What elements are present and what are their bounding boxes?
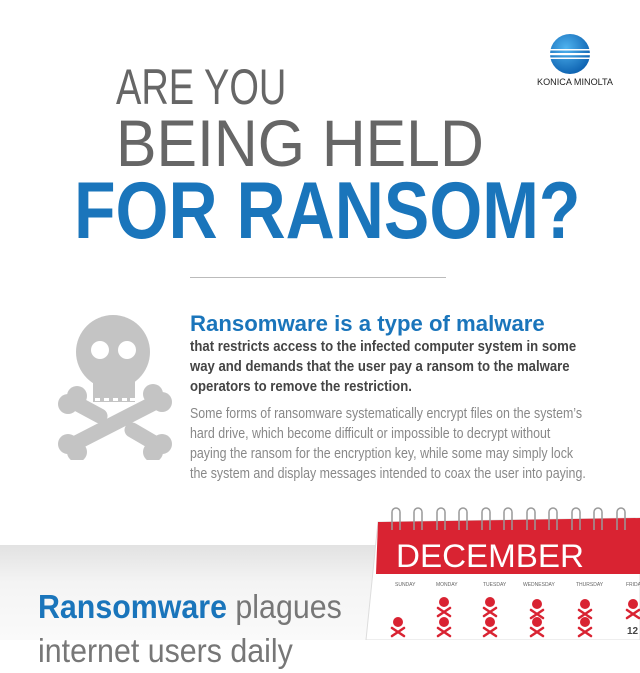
title: ARE YOU xyxy=(116,59,286,115)
text block: definition xyxy=(190,311,586,482)
text block: definition: Ransomware is a type of malware xyxy=(190,311,545,336)
calendar: WEDNESDAY xyxy=(523,582,556,588)
title: FOR RANSOM? xyxy=(74,166,580,256)
calendar: THURSDAY xyxy=(576,582,604,588)
text: internet users daily xyxy=(38,632,293,669)
calendar xyxy=(366,507,640,640)
logo: Konica Minolta xyxy=(537,34,614,88)
text block: definition: that restricts access to the infected computer system in some xyxy=(190,339,576,355)
heading: ransomware plagues xyxy=(38,588,342,669)
text block: definition: paying the ransom for the encryption key, while some may simply lock xyxy=(190,446,573,462)
calendar: MONDAY xyxy=(436,582,458,588)
calendar: 12 xyxy=(627,626,639,637)
title: BEING HELD xyxy=(116,106,484,180)
bottom gray band xyxy=(0,545,640,640)
logo: Konica Minolta: KONICA MINOLTA xyxy=(537,77,614,88)
text block: definition: Some forms of ransomware systematically encrypt files on the system’s xyxy=(190,406,582,422)
heading: ransomware plagues: Ransomware plagues xyxy=(38,588,342,625)
icon: skull and crossbones xyxy=(58,315,172,460)
calendar: TUESDAY xyxy=(483,582,507,588)
text block: definition: operators to remove the restriction. xyxy=(190,379,412,395)
text block: definition: the system and display messages intended to coax the user into paying. xyxy=(190,466,586,482)
title xyxy=(74,59,580,256)
calendar: DECEMBER xyxy=(396,538,584,574)
calendar: SUNDAY xyxy=(395,582,416,588)
text block: definition: way and demands that the user pay a ransom to the malware xyxy=(190,359,570,375)
text block: definition: hard drive, which become difficult or impossible to decrypt without xyxy=(190,426,550,442)
